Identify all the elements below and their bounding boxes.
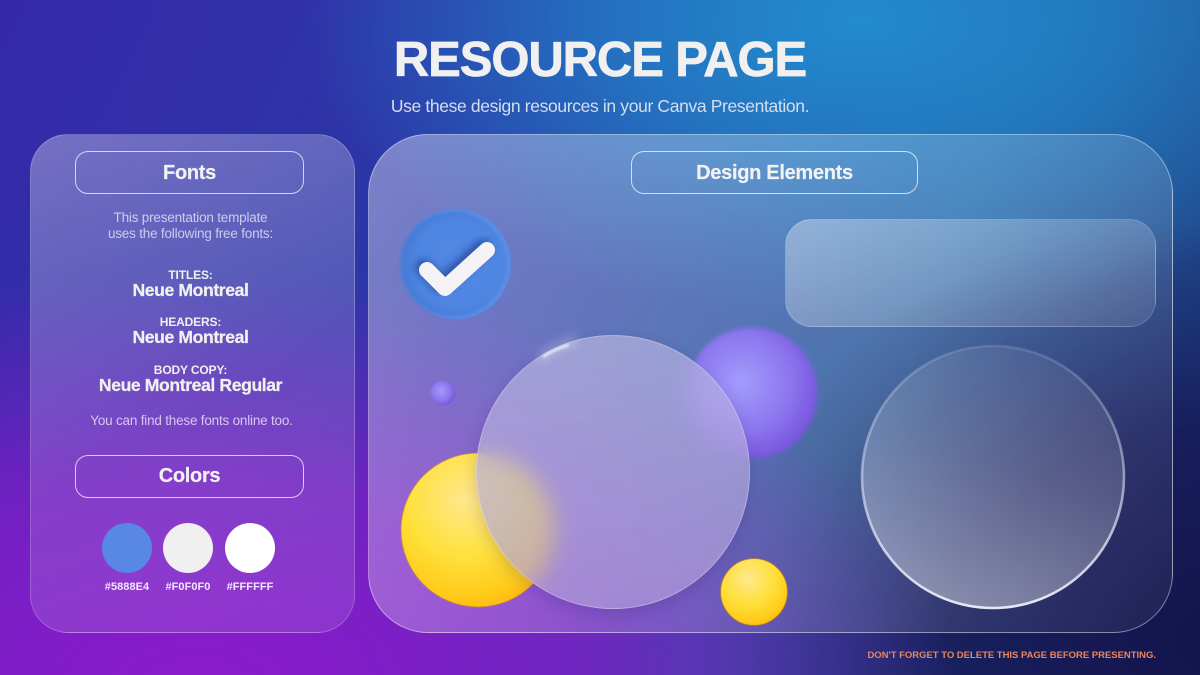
note: delete reminder: DON'T FORGET TO DELETE THIS PAGE BEFORE PRESENTING.: [867, 650, 1156, 661]
panel: fonts and colors: [30, 134, 355, 633]
swatch: light grey: [163, 523, 213, 573]
font entry: titles: TITLES:: [168, 268, 213, 282]
title: RESOURCE PAGE: [394, 33, 806, 87]
heading: design elements: [631, 151, 918, 194]
heading: design elements: Design Elements: [696, 162, 853, 184]
font entry: headers: Neue Montreal: [132, 327, 249, 347]
label: grey hex: #F0F0F0: [166, 581, 210, 593]
label: white hex: #FFFFFF: [227, 581, 273, 593]
font entry: body copy: [99, 363, 282, 395]
text block: intro: This presentation template: [114, 210, 267, 225]
font entry: headers: HEADERS:: [160, 315, 221, 329]
sphere: large yellow: [401, 453, 555, 607]
font entry: titles: [132, 268, 249, 300]
sphere: small yellow: [720, 558, 788, 626]
heading: colors: [75, 455, 304, 498]
heading: fonts: [75, 151, 304, 194]
glass rectangle: [785, 219, 1156, 327]
subtitle: Use these design resources in your Canva Presentation.: [391, 96, 809, 116]
font entry: headers: [132, 315, 249, 347]
text block: fonts online: You can find these fonts online too.: [90, 413, 293, 428]
font entry: body copy: Neue Montreal Regular: [99, 375, 282, 395]
swatch: white: [225, 523, 275, 573]
glass circle: frosted: [476, 335, 750, 609]
heading: colors: Colors: [159, 465, 220, 487]
font entry: titles: Neue Montreal: [132, 280, 249, 300]
sphere: small purple: [430, 380, 456, 406]
glass circle: outlined: [860, 344, 1126, 610]
swatch: blue: [102, 523, 152, 573]
heading: fonts: Fonts: [163, 162, 216, 184]
highlight: glass glint: [536, 334, 579, 360]
icon: check badge: [399, 209, 511, 319]
text block: intro: uses the following free fonts:: [108, 226, 273, 241]
text block: intro: [108, 210, 273, 241]
font entry: body copy: BODY COPY:: [154, 363, 227, 377]
label: blue hex: #5888E4: [105, 581, 149, 593]
decorative spheres: [400, 326, 820, 626]
sphere: large purple: [686, 328, 818, 458]
panel: design elements: [368, 134, 1173, 633]
